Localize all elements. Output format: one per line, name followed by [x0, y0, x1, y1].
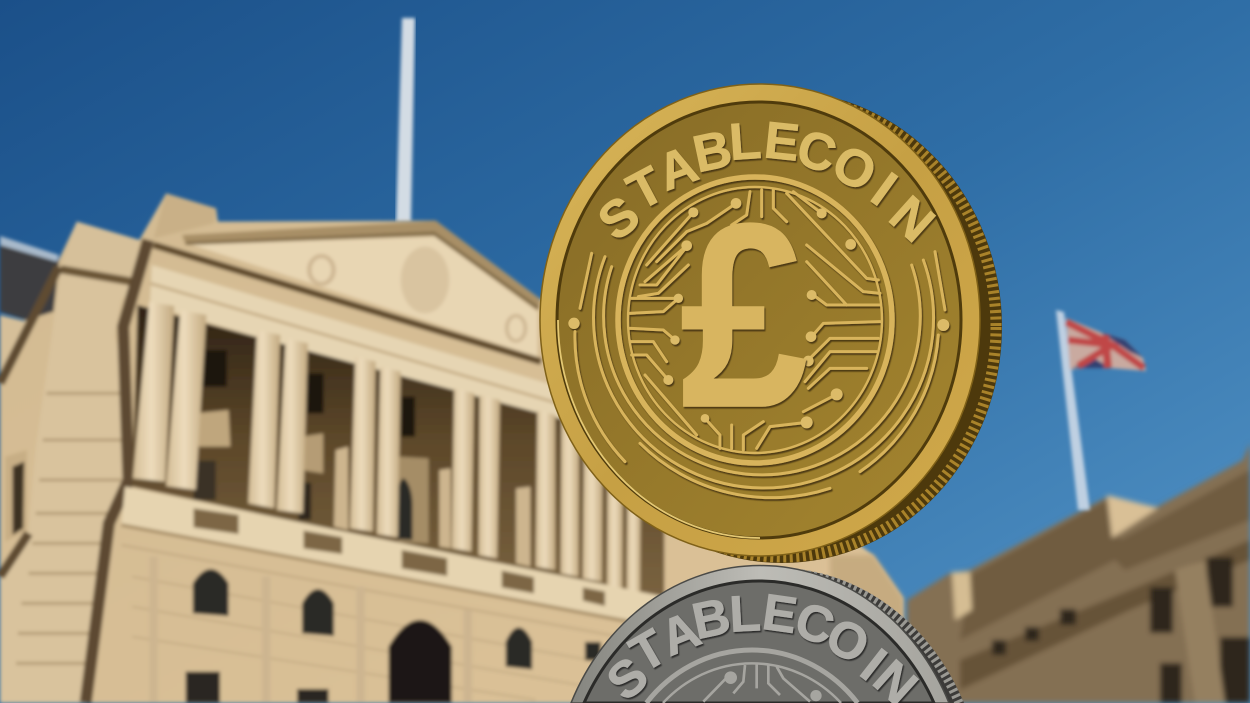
- gold coin lettering: STABLECOIN: A: [650, 135, 705, 203]
- tan building section behind coins: [830, 555, 905, 703]
- silver coin lettering: STABLECOIN: L: [728, 584, 762, 643]
- building: bank facade: [0, 193, 903, 703]
- silver coin lettering: STABLECOIN: I: [851, 638, 897, 691]
- facade silhouette: [0, 193, 903, 703]
- silver coin lettering: STABLECOIN: T: [621, 618, 676, 683]
- colonnade recess: [132, 305, 664, 600]
- gold coin lettering: STABLECOIN: O: [823, 134, 886, 204]
- gold coin reeded edge: [562, 91, 1002, 563]
- lower storey rustication: [132, 577, 607, 700]
- right circuit traces: [757, 192, 880, 448]
- building: right hand wing: [905, 443, 1250, 703]
- silver coin circuit ring: [646, 650, 858, 703]
- silver coin lettering: STABLECOIN: E: [759, 583, 801, 644]
- flagpole on the bank roof: [396, 18, 415, 222]
- top and bottom circuit traces: [647, 190, 787, 450]
- gold coin lettering: STABLECOIN: E: [762, 111, 802, 173]
- frieze below pediment: [150, 265, 714, 473]
- gold coin lettering: STABLECOIN: C: [790, 119, 842, 185]
- silver coin lettering: STABLECOIN: O: [817, 606, 879, 675]
- cream quoin: [952, 572, 972, 620]
- silver coin reeded edge: [588, 568, 964, 703]
- silver stablecoin: [571, 566, 964, 703]
- gold coin lettering: STABLECOIN: S: [588, 185, 651, 252]
- circuit rings: [618, 177, 892, 463]
- gold coin lettering: STABLECOIN: T: [618, 156, 674, 222]
- gold coin lettering: STABLECOIN: [588, 111, 945, 254]
- cream corner block: [1107, 495, 1158, 538]
- colonnade windows: [194, 350, 415, 540]
- icon: Union flag on pole: [1056, 310, 1146, 510]
- circuit board pattern: [568, 177, 949, 498]
- flag pole: [1056, 310, 1090, 510]
- gold coin field: [557, 102, 961, 538]
- silver coin lettering: STABLECOIN: C: [789, 591, 841, 656]
- highlight line inside rim: [558, 320, 760, 538]
- flag cloth: [1066, 318, 1146, 371]
- silver coin lettering: STABLECOIN: A: [652, 600, 708, 667]
- lower storey ledge: [121, 487, 664, 645]
- right building windows: [992, 557, 1250, 703]
- circuit nodes: [568, 198, 949, 428]
- pediment: [154, 221, 541, 362]
- gold coin rim: [540, 84, 980, 556]
- gold coin lettering: STABLECOIN: L: [727, 112, 763, 172]
- slate roof on left: [0, 236, 59, 377]
- pilasters: [154, 557, 468, 702]
- silver coin rim: [571, 566, 949, 703]
- outer concentric arcs: [575, 252, 945, 498]
- right building upper shadow: [960, 470, 1250, 640]
- gold stablecoin: [540, 84, 1002, 563]
- right building mass: [905, 443, 1250, 703]
- gold coin lettering: STABLECOIN: N: [878, 185, 945, 254]
- balustrades: [194, 508, 605, 606]
- right building lower band: [960, 540, 1250, 690]
- corner tower stonework: [0, 193, 216, 703]
- pound sign: £: [680, 170, 808, 462]
- left circuit traces: [630, 246, 697, 435]
- gold coin lettering: STABLECOIN: B: [688, 120, 737, 184]
- central arched doorway: [389, 620, 452, 703]
- arched windows: [193, 569, 601, 669]
- ground floor windows: [186, 672, 329, 703]
- silver coin lettering: STABLECOIN: B: [687, 587, 735, 650]
- gold coin lettering: STABLECOIN: I: [861, 162, 907, 217]
- columns: [133, 302, 641, 595]
- silver coin lettering: STABLECOIN: [596, 583, 928, 703]
- right building pilaster: [1175, 560, 1225, 703]
- silver coin field: [584, 581, 934, 703]
